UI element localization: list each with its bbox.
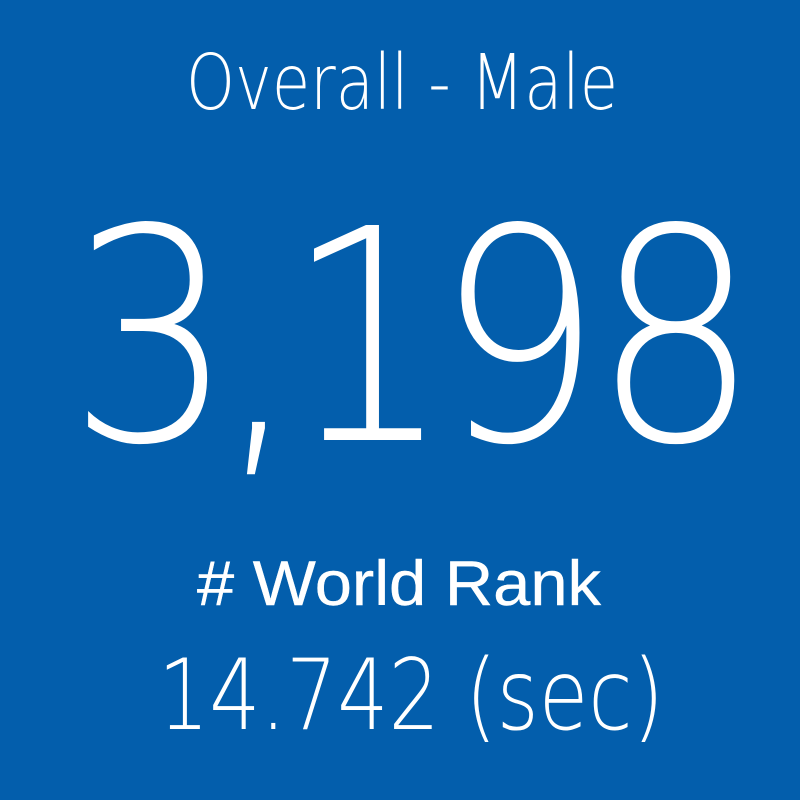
big number: 3,198 — [68, 166, 759, 510]
title: Overall - Male — [186, 39, 618, 128]
time value: 14.742 (sec) — [158, 639, 664, 753]
subtitle: world rank: # World Rank — [197, 549, 602, 619]
